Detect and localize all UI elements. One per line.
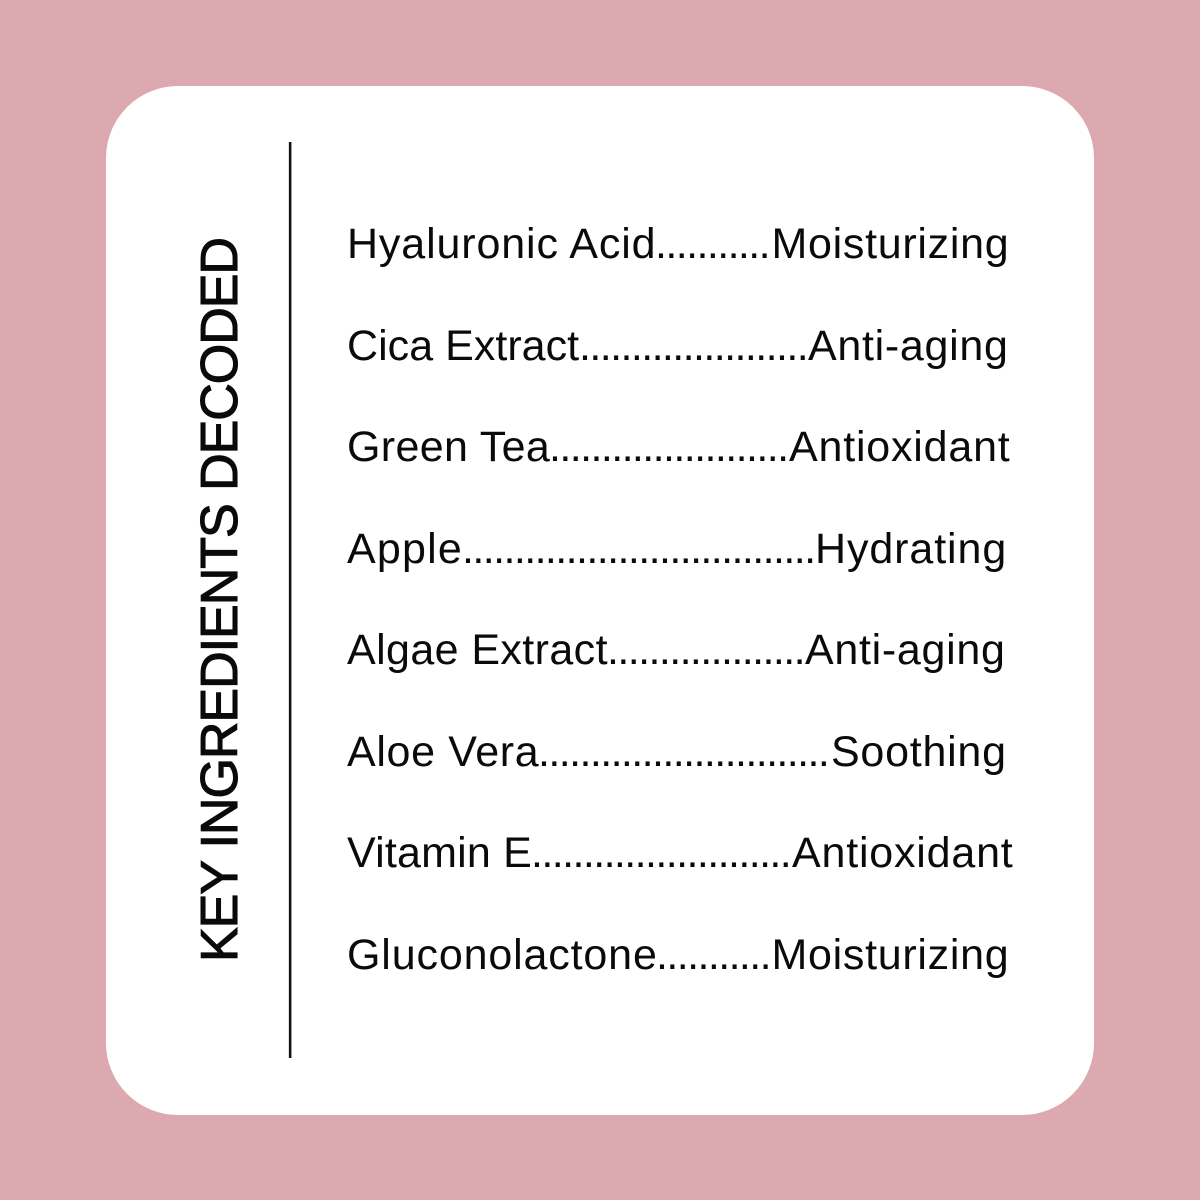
list row: Aloe Vera: Aloe Vera [347, 728, 539, 776]
list row: Gluconolactone: ........... [656, 931, 770, 979]
list row: Algae Extract [347, 626, 1006, 674]
list row: Hyaluronic Acid: ........... [655, 220, 769, 268]
list row: Vitamin E: Vitamin E [347, 829, 532, 877]
list row: Aloe Vera: ............................ [538, 728, 828, 776]
list row: Hyaluronic Acid [347, 220, 1009, 268]
list row: Gluconolactone: Gluconolactone [347, 931, 658, 979]
list row: Cica Extract: ...................... [579, 322, 807, 370]
list row: Algae Extract: Algae Extract [347, 626, 608, 674]
list row: Algae Extract: ................... [607, 626, 804, 674]
list row: Gluconolactone: Moisturizing [772, 931, 1009, 979]
list row: Gluconolactone [347, 931, 1009, 979]
list row: Green Tea: Green Tea [347, 423, 550, 471]
list row: Aloe Vera [347, 728, 1007, 776]
list row: Cica Extract [347, 322, 1009, 370]
list row: Aloe Vera: Soothing [831, 728, 1007, 776]
list row: Algae Extract: Anti-aging [805, 626, 1006, 674]
vertical divider line [289, 142, 291, 1058]
panel: white card [106, 86, 1094, 1115]
list row: Green Tea: ....................... [549, 423, 787, 471]
list row: Cica Extract: Cica Extract [347, 322, 579, 370]
list row: Vitamin E: ......................... [531, 829, 790, 877]
list row: Vitamin E [347, 829, 1014, 877]
list row: Apple: Hydrating [815, 525, 1007, 573]
list row: Hyaluronic Acid: Hyaluronic Acid [347, 220, 656, 268]
list row: Vitamin E: Antioxidant [792, 829, 1014, 877]
list row: Apple [347, 525, 1007, 573]
title: key ingredients decoded: KEY INGREDIENTS DECODED [191, 238, 249, 962]
list row: Hyaluronic Acid: Moisturizing [772, 220, 1009, 268]
list row: Apple: .................................. [462, 525, 814, 573]
list row: Green Tea [347, 423, 1011, 471]
list row: Green Tea: Antioxidant [789, 423, 1011, 471]
list row: Apple: Apple [347, 525, 463, 573]
list row: Cica Extract: Anti-aging [808, 322, 1009, 370]
